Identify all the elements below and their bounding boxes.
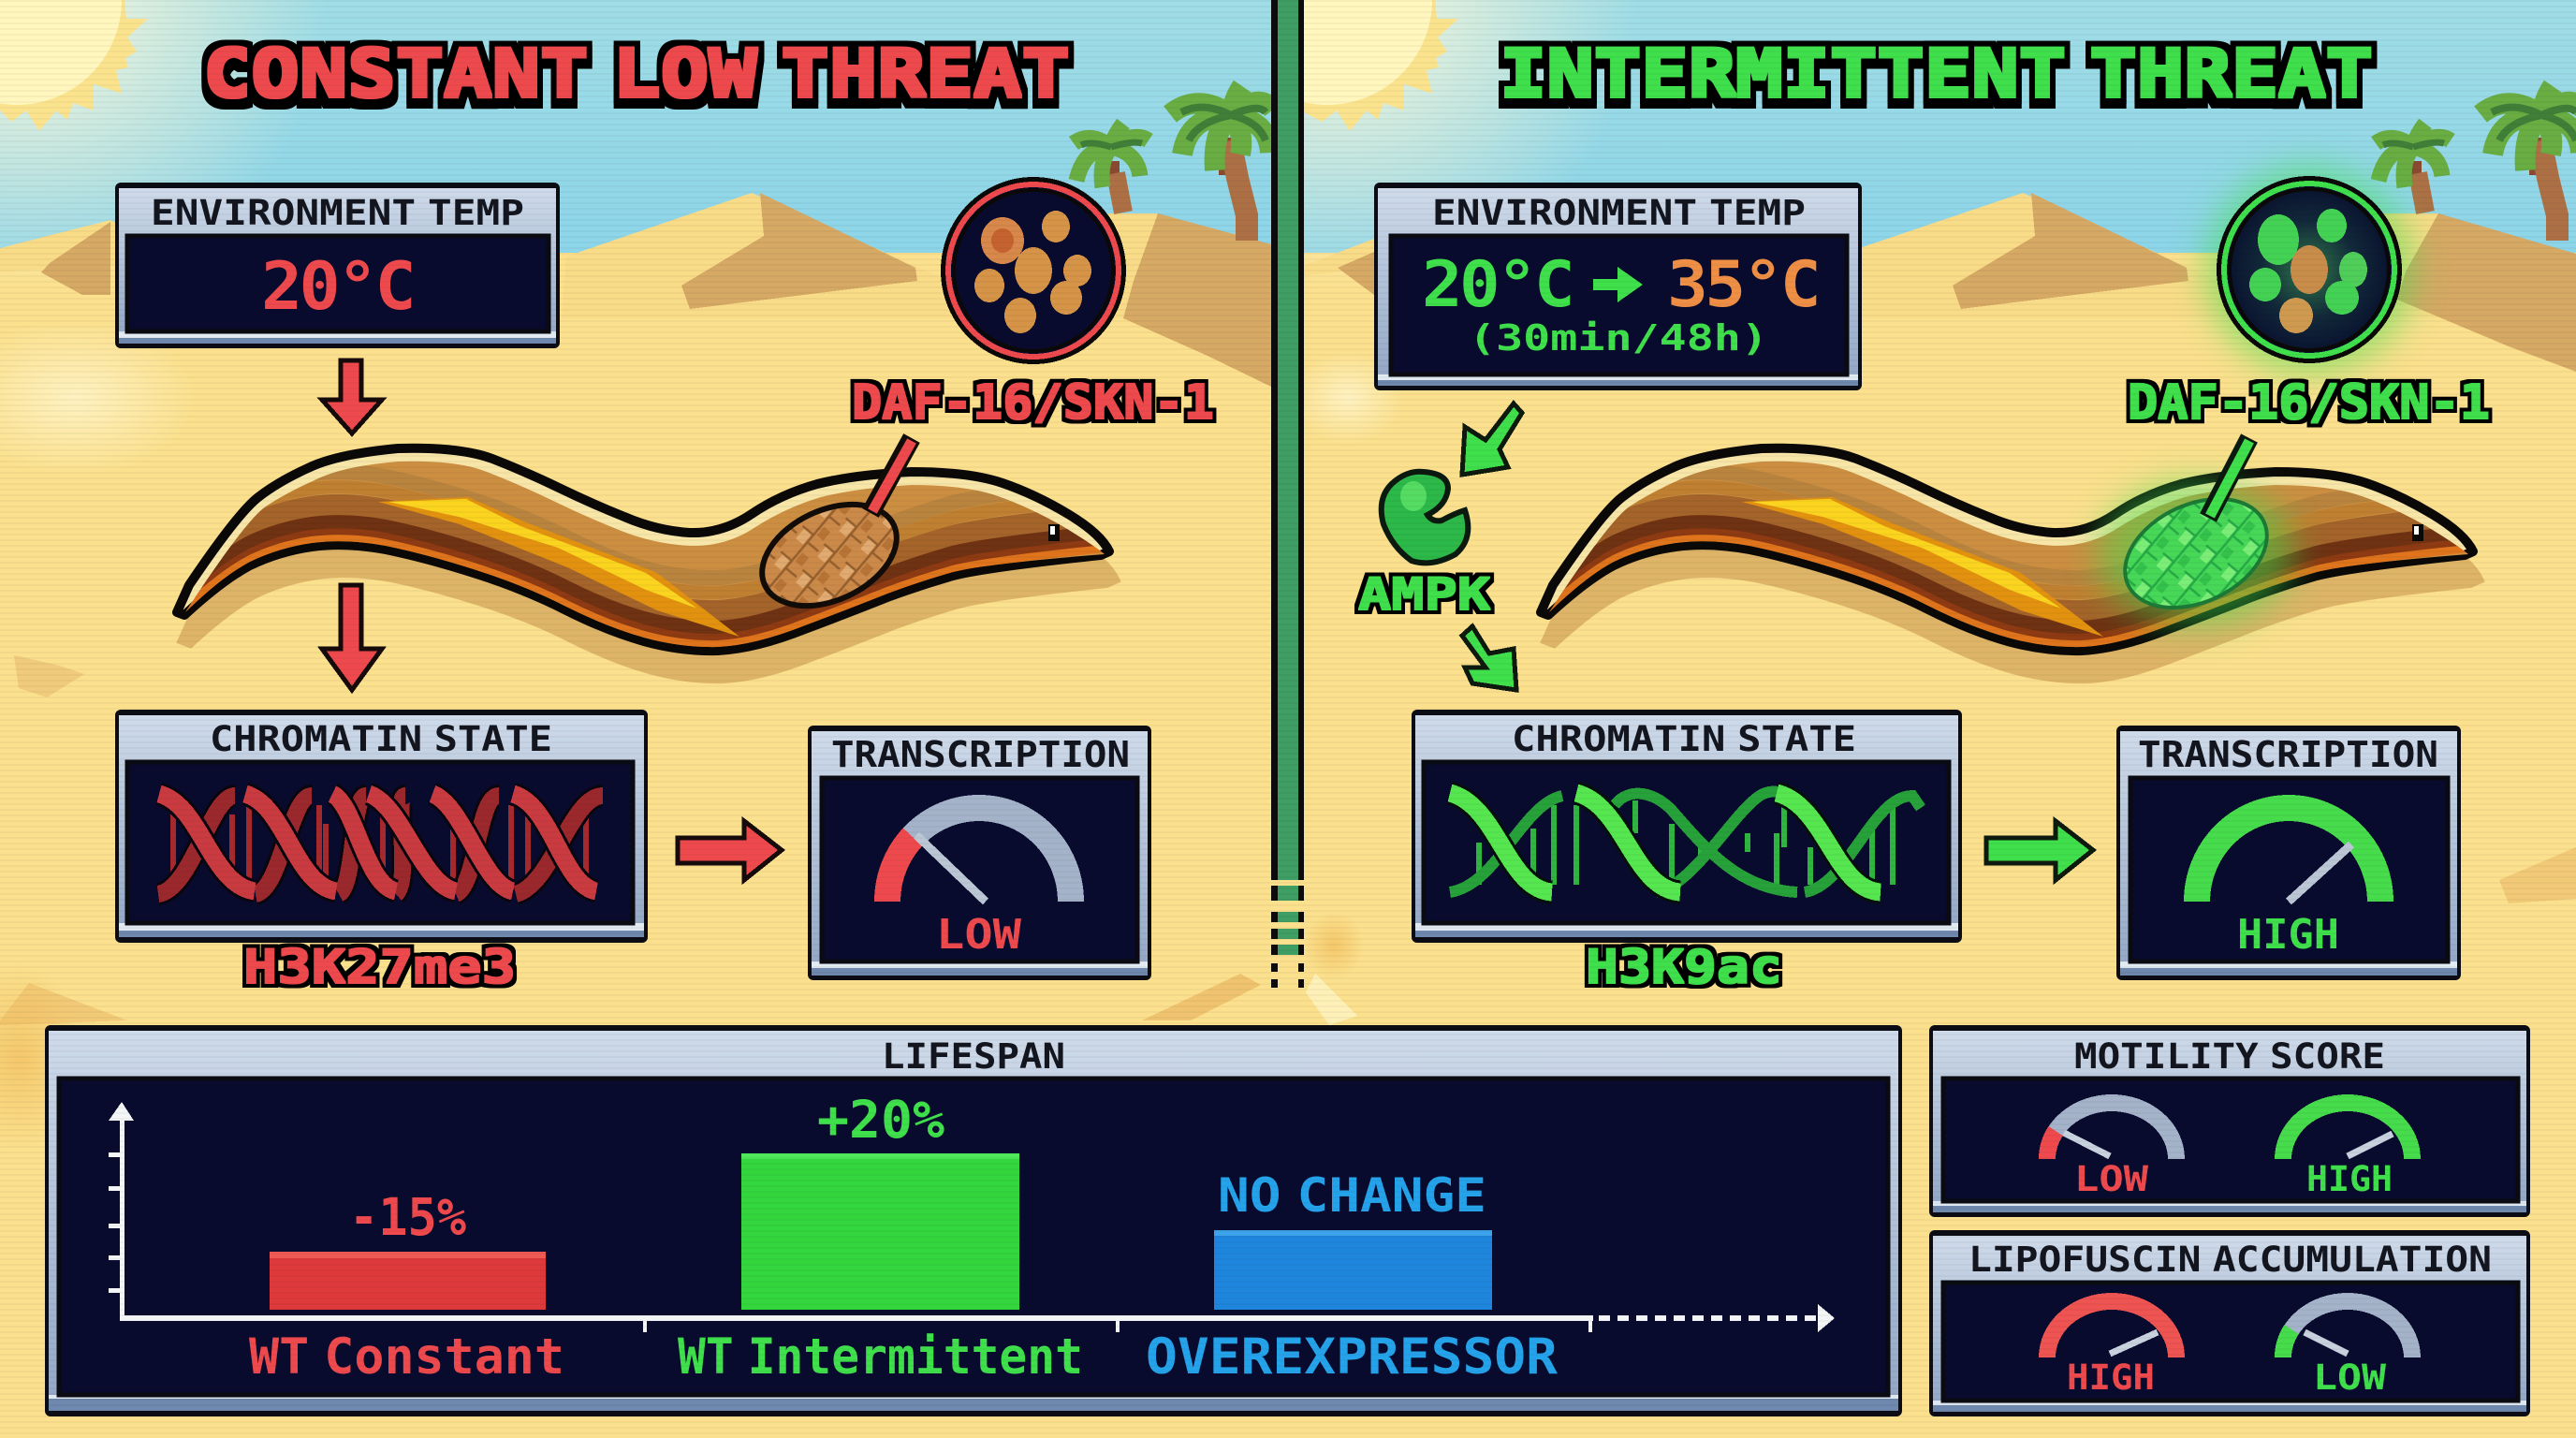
label: DAF-16/SKN-1 red: DAF-16/SKN-1 <box>852 375 1214 431</box>
bar: WT constant <box>270 1252 546 1310</box>
arrow: worm to chromatin <box>322 585 382 690</box>
arrow: chromatin to transcription green <box>1986 821 2093 880</box>
icon: glowing cell with green nuclei <box>2204 165 2414 374</box>
left scene: sun, dunes and palms <box>0 0 1275 1152</box>
value: motility low: LOW <box>2074 1159 2149 1199</box>
panel: chromatin state intermittent <box>1412 710 1962 943</box>
label: transcription: TRANSCRIPTION <box>2138 734 2438 775</box>
gauge: motility high <box>2283 1103 2412 1159</box>
value: lipofuscin low: LOW <box>2313 1357 2387 1398</box>
label: chromatin state: CHROMATIN STATE <box>210 719 552 759</box>
label: H3K27me3: H3K27me3 <box>243 940 516 994</box>
axes <box>109 1102 1835 1332</box>
panel: transcription low <box>808 726 1151 980</box>
gauge: low transcription <box>887 808 1071 902</box>
chart: condensed red DNA helix <box>158 794 603 894</box>
label: DAF-16/SKN-1 green: DAF-16/SKN-1 <box>2128 375 2490 431</box>
label: AMPK: AMPK <box>1358 569 1491 621</box>
value: lipofuscin high: HIGH <box>2067 1357 2155 1398</box>
label: lipofuscin accumulation: LIPOFUSCIN ACCUMULATION <box>1969 1240 2492 1280</box>
icon: cell with brown nuclei <box>941 177 1126 364</box>
label: motility score: MOTILITY SCORE <box>2074 1036 2385 1077</box>
organ: brown intestine <box>746 484 913 626</box>
axis label: WT constant: WT Constant <box>249 1328 564 1386</box>
bar: overexpressor <box>1214 1230 1492 1310</box>
value: 35C orange: 35°C <box>1667 248 1818 322</box>
title: constant low threat: CONSTANT LOW THREAT <box>203 36 1070 112</box>
chart: open green DNA helix <box>1450 792 1921 892</box>
label: environment temp: ENVIRONMENT TEMP <box>151 193 524 233</box>
value: cycle duration: (30min/48h) <box>1469 317 1768 359</box>
arrow: temp to AMPK <box>1462 404 1522 475</box>
label: environment temp: ENVIRONMENT TEMP <box>1432 193 1806 233</box>
panel: transcription high <box>2116 726 2461 980</box>
background: sky <box>0 0 2576 281</box>
axis label: WT intermittent: WT Intermittent <box>678 1328 1083 1386</box>
arrow: temp to worm <box>322 360 382 433</box>
organ glow <box>2098 480 2294 626</box>
panel: lipofuscin accumulation <box>1929 1230 2530 1416</box>
worm: intermittent threat <box>1532 440 2479 679</box>
icon: small temp arrow <box>1593 267 1643 302</box>
arrow: chromatin to transcription red <box>678 821 782 880</box>
bar: WT intermittent <box>741 1153 1019 1310</box>
value: low: LOW <box>936 911 1022 959</box>
label: chromatin state: CHROMATIN STATE <box>1512 719 1856 759</box>
label: transcription: TRANSCRIPTION <box>831 734 1130 775</box>
gauge: motility low <box>2047 1103 2176 1159</box>
value: high: HIGH <box>2237 911 2339 959</box>
label: lifespan: LIFESPAN <box>882 1036 1065 1077</box>
value: 20C constant: 20°C <box>261 248 413 325</box>
pointer: red line to organ <box>871 438 912 513</box>
gauge: high transcription <box>2197 808 2380 902</box>
organ: green intestine <box>2108 477 2284 629</box>
value: motility high: HIGH <box>2306 1159 2393 1199</box>
axis label: overexpressor: OVEREXPRESSOR <box>1146 1328 1558 1386</box>
center divider <box>1271 0 1304 988</box>
icon: AMPK enzyme <box>1382 472 1468 563</box>
value: -15%: -15% <box>349 1187 466 1247</box>
panel: lifespan bar chart <box>45 1025 1902 1416</box>
panel: environment temp intermittent <box>1374 183 1862 390</box>
panel: motility score <box>1929 1025 2530 1217</box>
value: +20%: +20% <box>817 1090 944 1150</box>
label: H3K9ac: H3K9ac <box>1586 940 1782 994</box>
panel: chromatin state constant <box>115 710 648 943</box>
gauge: lipofuscin low <box>2283 1301 2412 1357</box>
title: intermittent threat: INTERMITTENT THREAT <box>1500 36 2373 112</box>
pointer: green line to organ <box>2208 438 2249 518</box>
value: 20C green: 20°C <box>1422 248 1572 322</box>
gauge: lipofuscin high <box>2047 1301 2176 1357</box>
arrow: AMPK to chromatin <box>1462 626 1516 690</box>
panel: environment temp constant <box>115 183 560 348</box>
value: no change: NO CHANGE <box>1218 1168 1486 1223</box>
right scene: sun, dunes and palms <box>1304 0 2576 1025</box>
worm: constant threat <box>168 440 1115 679</box>
